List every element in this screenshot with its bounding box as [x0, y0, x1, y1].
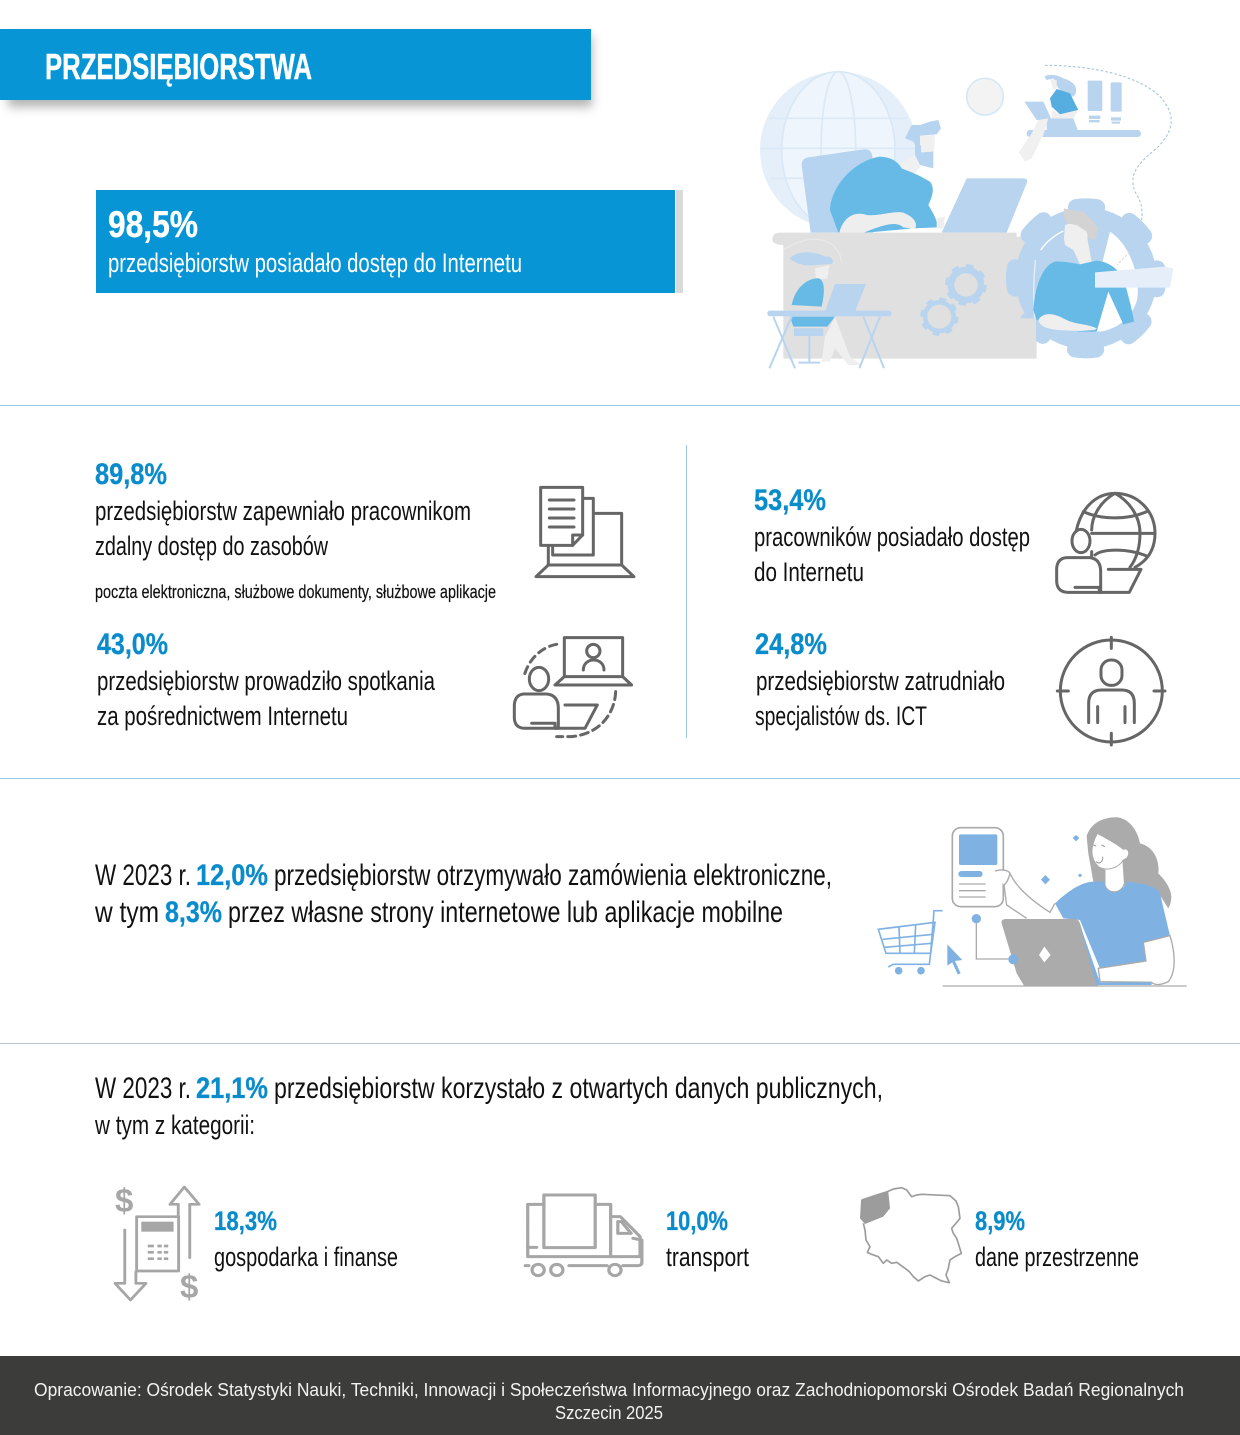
desk — [772, 233, 1037, 359]
category: spatial data — [860, 1188, 1139, 1283]
heading: open public data: przedsiębiorstw korzystało z otwartych danych publicznych, — [274, 1072, 883, 1105]
description: pracowników posiadało dostęp — [754, 522, 1030, 552]
icon: person with globe — [1057, 493, 1155, 592]
icon: finance calculator and arrows: $ — [115, 1182, 133, 1219]
icon: map of Poland — [860, 1188, 961, 1283]
description: zdalny dostęp do zasobów — [95, 531, 328, 561]
callout: internet access — [96, 190, 683, 293]
icon: video meeting — [514, 638, 632, 737]
text block: electronic orders: przedsiębiorstw otrzymywało zamówienia elektroniczne, — [274, 859, 832, 892]
text block: electronic orders: 12,0% — [196, 859, 268, 892]
description: specjalistów ds. ICT — [755, 701, 927, 731]
icon: shopping cart — [878, 911, 943, 974]
label: gospodarka i finanse — [214, 1242, 398, 1272]
category: transport — [525, 1195, 749, 1276]
icon: cursor — [947, 944, 962, 974]
text block: electronic orders: w tym — [94, 896, 159, 929]
description — [754, 522, 1030, 587]
header banner — [0, 29, 592, 107]
value: 89,8% — [95, 458, 167, 491]
value: 18,3% — [214, 1206, 277, 1236]
icon: finance calculator and arrows: $ — [180, 1268, 198, 1305]
callout description: przedsiębiorstw posiadało dostęp do Internetu — [108, 248, 522, 278]
heading: open public data: 21,1% — [196, 1072, 268, 1105]
description — [95, 496, 471, 561]
footer — [0, 1356, 1240, 1435]
large gear with person — [1000, 207, 1173, 358]
stat: ICT specialists — [755, 628, 1005, 731]
woman — [1004, 817, 1174, 985]
small seated woman at table — [767, 252, 892, 368]
footer: Opracowanie: Ośrodek Statystyki Nauki, Techniki, Innowacji i Społeczeństwa Informacyjnego oraz Zachodniopomorski Ośrodek Badań Regionalnych — [34, 1380, 1184, 1400]
small gears on desk — [922, 266, 985, 334]
description: przedsiębiorstw zapewniało pracownikom — [95, 496, 471, 526]
callout value: 98,5% — [108, 204, 198, 245]
heading: open public data — [94, 1072, 883, 1140]
label: transport — [666, 1242, 749, 1272]
description: przedsiębiorstw prowadziło spotkania — [97, 666, 436, 696]
illustration: people working at desk with globe and gears — [760, 65, 1171, 368]
description: za pośrednictwem Internetu — [97, 701, 348, 731]
description — [97, 666, 436, 731]
man at laptop — [830, 120, 945, 233]
stat: online meetings — [97, 628, 436, 731]
category: economy and finance — [115, 1182, 398, 1305]
icon: finance calculator and arrows — [115, 1182, 199, 1305]
icon: truck — [525, 1195, 642, 1276]
label: dane przestrzenne — [975, 1242, 1139, 1272]
heading: open public data: W 2023 r. — [95, 1072, 191, 1105]
value: 43,0% — [97, 628, 168, 661]
note: poczta elektroniczna, służbowe dokumenty, służbowe aplikacje — [95, 582, 496, 602]
value: 8,9% — [975, 1206, 1025, 1236]
title: PRZEDSIĘBIORSTWA — [45, 46, 312, 87]
phone card — [952, 828, 1010, 959]
text block: electronic orders — [94, 859, 832, 929]
value: 53,4% — [754, 484, 826, 517]
laptop — [1001, 919, 1152, 986]
value: 10,0% — [666, 1206, 728, 1236]
text block: electronic orders: W 2023 r. — [95, 859, 191, 892]
illustration: woman shopping online — [878, 817, 1187, 986]
icon: person in target — [1057, 637, 1165, 745]
top figure with laptop and exclamation marks — [1019, 75, 1141, 162]
icon: documents on laptop — [536, 487, 634, 577]
description — [755, 666, 1005, 731]
description: przedsiębiorstw zatrudniało — [756, 666, 1005, 696]
value: 24,8% — [755, 628, 827, 661]
text block: electronic orders: 8,3% — [165, 896, 222, 929]
footer: Szczecin 2025 — [555, 1403, 663, 1423]
description: do Internetu — [754, 557, 864, 587]
heading: open public data: w tym z kategorii: — [94, 1110, 255, 1140]
stat: employees with internet — [754, 484, 1030, 587]
text block: electronic orders: przez własne strony internetowe lub aplikacje mobilne — [228, 896, 783, 929]
dashed connector path — [1045, 65, 1171, 220]
stat: remote access — [95, 458, 496, 602]
